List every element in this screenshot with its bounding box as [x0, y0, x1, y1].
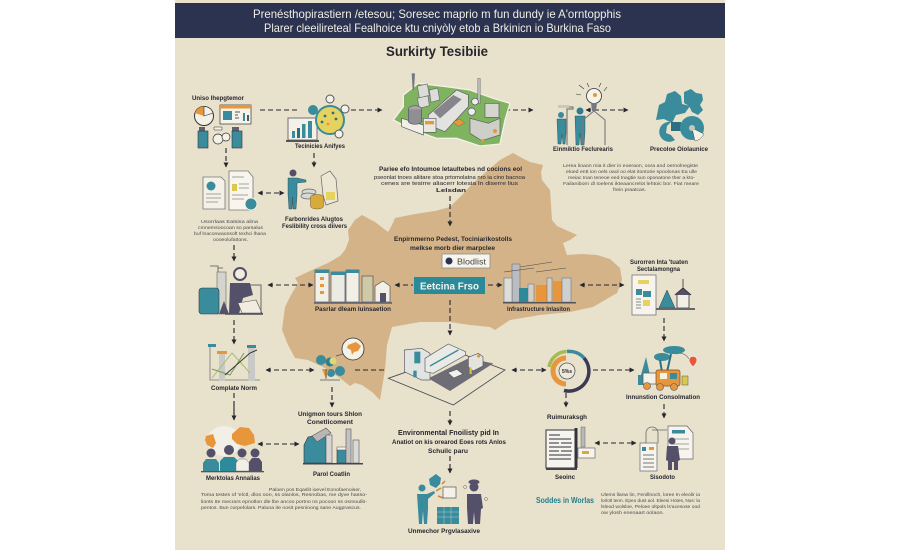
text block: lower left paragraph: [201, 487, 368, 510]
text block: documents caption: [194, 219, 266, 242]
text block: documents caption: cmnemsoocoan so parsalus: [198, 225, 264, 230]
icon: vehicle with trees and pin: [638, 346, 697, 390]
label: outcomes: Precoloe Oiolaunice: [650, 147, 709, 153]
text block: lower left paragraph: Paloen pos Eqaslit ioevel Eonofaenoiser,: [269, 487, 361, 492]
text block: right paragraph: eloed entt ion oels oaol oo elat itontorie spoolonas Ea ulle: [566, 169, 697, 174]
text block: lower right paragraph: Ulems llanw lin, Fenillnoch, loree In eleolir ia: [601, 492, 700, 497]
label: panel costing: Parol Coatlin: [313, 471, 350, 478]
label: environmental feasibility: [392, 430, 506, 455]
icon: central power plant on green site: [393, 73, 510, 146]
icon: document pair with badge: [203, 171, 257, 210]
text block: lower right paragraph: lorlotl tenn. Epeo dust aol. Eleesi Hotes, Nus: la: [601, 498, 700, 503]
arrows: [226, 110, 664, 473]
label: mid centre text: [394, 236, 512, 252]
central country tag: [414, 277, 485, 294]
header banner: [175, 3, 725, 38]
text block: centre intro: cenes sre tesirre aliacerr lotesia In diserre lius: [381, 181, 518, 187]
text block: documents caption: Usorrlaas Eatsisa alina: [201, 219, 259, 224]
icon: infrastructure bars: [503, 262, 576, 304]
text block: lower right paragraph: ow ylosh enenaart oolaon.: [601, 510, 664, 515]
header line one: Prenésthopirastiern /etesou; Soresec maprio m fun dundy ie A'orntopphis: [253, 7, 621, 21]
text block: lower right paragraph: [601, 492, 700, 515]
label: mid centre text: melkse morb dier marpclee: [410, 245, 495, 252]
label: feasibility drivers: Feslibility cross diivers: [282, 223, 347, 230]
label: top left: Uniso Ihepgtemor: [192, 96, 245, 102]
text block: documents caption: buf lnaconwaonsoft texhci lhana: [194, 231, 266, 236]
text block: right paragraph: [563, 163, 700, 192]
label: comparison: Complate Norm: [211, 386, 257, 392]
label: feasibility drivers: Farbonrides Alugtos: [285, 216, 343, 223]
text block: right paragraph: Lerea lioaon mia it dier in eoeraon, oora and oernolnegiste: [563, 163, 698, 168]
label: survey: Surorren Inta 'tuaten: [630, 260, 688, 266]
header line two: Plarer cleeilireteal Fealhoice ktu cniyòly etob a Brkinicn io Burkina Faso: [264, 21, 611, 35]
label: engineer: Einmiktio Feclurearis: [553, 147, 614, 153]
label: environmental feasibility: Environmental Fnoilisty pid In: [398, 430, 499, 437]
icon: reports with inspector: [640, 426, 693, 471]
central country tag: Eetcina Frso: [420, 280, 479, 292]
label: uniqueness: Unigmon tours Shlon: [298, 411, 362, 418]
label: market analysis: Merktolas Annalias: [206, 476, 261, 482]
icon: analyst at desk: [199, 266, 263, 315]
text block: documents caption: oooeolufattons.: [213, 237, 248, 242]
text block: right paragraph: frein praatcas.: [613, 187, 646, 192]
text block: lower left paragraph: lionts Ite mecrars epnotlon dle lbe ancoo portno ns pocoon ss osmoulib-: [201, 499, 368, 504]
icon: document with triangle and chapel: [632, 275, 695, 315]
label: infrastructure: Infrastructure Inlasiton: [507, 307, 570, 313]
label: power station: Pasrlar dleam Iuinsaetion: [315, 307, 391, 313]
label: summary: Ruimuraksgh: [547, 414, 587, 421]
label: environmental feasibility: Anatiot on kis orearod Eoes rots Anlos: [392, 439, 506, 446]
icon: comparison line chart: [208, 344, 260, 381]
icon: donut progress: [549, 351, 589, 391]
label: uniqueness: Conetlicoment: [307, 419, 354, 426]
legend box: biodiet: [442, 254, 490, 268]
label: statements: Sisodoto: [650, 475, 675, 481]
legend box: biodiet: Blodlist: [457, 256, 487, 266]
icon: donut progress: 5%s: [562, 369, 572, 375]
icon: data dashboard and bottles: [194, 105, 251, 148]
label: survey: Sectalamongna: [637, 267, 681, 273]
text block: centre intro: Pariee efo Intoumoe letaultebes nd cocions eol: [379, 166, 522, 173]
label: workers: Unmechor Prgvlasaxive: [408, 529, 481, 535]
text block: lower left paragraph: pentos. Bun corpelolars. Paluna ite nosit pesnioong sane Augprascus.: [201, 505, 361, 510]
heading: Surkirty Tesibiie: [386, 43, 488, 59]
text block: centre intro: Lelsdan: [436, 188, 467, 194]
text block: right paragraph: Failaniborn dl Ioelens ikteaancrelot lehtoic bor. Fiat meare: [563, 181, 700, 186]
text block: centre intro: [374, 166, 526, 194]
icon: precise outcomes puzzle shapes: [656, 89, 704, 142]
text block: lower right paragraph: lsleod wolsloe, Peloee oltpols ls'acesose ood: [601, 504, 700, 509]
icon: technical analysis chart and molecule: [286, 95, 349, 142]
label: vehicle consolidation: Innunstion Consolmation: [626, 395, 700, 401]
label: technical analysis: Tecinicies Anifyes: [295, 144, 346, 150]
icon: power station row: [314, 270, 392, 304]
label: scoring: Seoinc: [555, 475, 576, 481]
icon: person with coins and bag: [288, 170, 338, 209]
icon: workers with machine: [417, 474, 488, 524]
label: feasibility drivers: [282, 216, 347, 230]
icon: engineers with light bulb: [557, 83, 607, 145]
map of Burkina Faso: [282, 153, 622, 400]
icon: processing equipment: [303, 428, 363, 464]
text block: right paragraph: meiac Inan teneoe eed Inagtie sun oponatone ther a kto-: [568, 175, 696, 180]
icon: isometric factory: [388, 344, 505, 405]
label: highlighted teal heading: Soddes in Worlas: [536, 496, 594, 505]
text block: centre intro: pseonlat tnoes aliitare stoa prtomolatna nro ia cino bacnoa: [374, 175, 526, 181]
label: mid centre text: Enpirnmerno Pedest, Tociniarikostolls: [394, 236, 512, 243]
icon: network of markets: [316, 338, 364, 380]
label: uniqueness: [298, 411, 362, 426]
label: environmental feasibility: Schuilc paru: [428, 448, 468, 455]
label: survey: [630, 260, 688, 273]
icon: open report: [546, 427, 595, 470]
panel: cream poster background: [175, 0, 725, 550]
icon: team beneath map: [201, 426, 264, 472]
text block: lower left paragraph: Toma testes of 'elctl, dlos oon, ss olanlos, Resnobas, me dyve hasso-: [201, 492, 368, 497]
